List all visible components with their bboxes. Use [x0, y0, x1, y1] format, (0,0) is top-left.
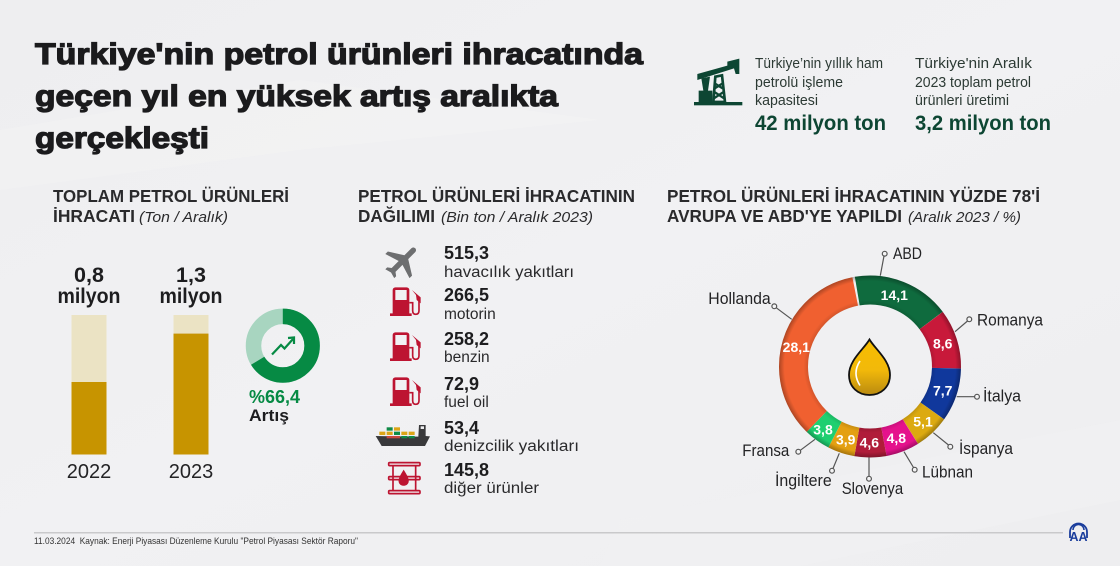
increase label: Artış — [249, 407, 289, 425]
text: December production: ürünleri üretimi — [915, 93, 1009, 109]
heading: (Bin ton / Aralık 2023) — [441, 210, 593, 226]
heading: TOPLAM PETROL ÜRÜNLERİ — [53, 186, 289, 206]
item: fuel oil: 72,9 — [444, 374, 479, 394]
donut chart: 14,1 — [881, 287, 908, 303]
title — [35, 38, 643, 155]
label: İtalya: İtalya — [983, 387, 1022, 406]
heading: İHRACATI — [53, 206, 135, 226]
source note: 11.03.2024 Kaynak: Enerji Piyasası Düzenleme Kurulu "Petrol Piyasası Sektör Raporu" — [34, 536, 358, 547]
donut chart — [762, 258, 978, 475]
heading — [53, 186, 289, 226]
item: aviation fuel: havacılık yakıtları — [444, 264, 574, 281]
text: refining capacity: 42 milyon ton — [755, 112, 886, 135]
bar: 2022: milyon — [58, 284, 120, 308]
panel: key figures — [694, 56, 1051, 135]
heading: (Ton / Aralık) — [139, 210, 228, 226]
label: Fransa: Fransa — [742, 442, 790, 460]
label: İtalya — [957, 387, 1022, 406]
label: Lübnan: Lübnan — [922, 463, 973, 481]
title: geçen yıl en yüksek artış aralıkta — [35, 80, 558, 113]
item: diesel: 266,5 — [444, 285, 489, 305]
bar: 2022 — [58, 263, 120, 483]
icon: oil drop — [849, 340, 890, 395]
label: Lübnan — [904, 452, 973, 481]
increase label: %66,4 — [249, 386, 301, 407]
icon: rising arrow — [272, 338, 294, 354]
item: petrol: 258,2 — [444, 329, 489, 349]
label: Romanya — [955, 312, 1044, 332]
bar: 2023 — [160, 263, 222, 483]
text: refining capacity: petrolü işleme — [755, 75, 843, 91]
donut chart: 3,9 — [836, 431, 856, 447]
title: Türkiye'nin petrol ürünleri ihracatında — [35, 38, 643, 71]
item: other products: 145,8 — [444, 460, 489, 480]
icon: barrel — [389, 463, 420, 494]
donut chart: 28,1 — [783, 339, 810, 355]
donut chart: 8,6 — [933, 335, 953, 351]
item: fuel oil: fuel oil — [444, 394, 489, 411]
icon: fuel pump — [390, 377, 421, 406]
bar: 2023: milyon — [160, 284, 222, 308]
icon: oil pump jack — [694, 59, 742, 105]
donut chart: 4,8 — [887, 430, 906, 446]
label: Romanya: Romanya — [977, 312, 1044, 330]
label: İngiltere: İngiltere — [775, 471, 832, 490]
text: refining capacity: kapasitesi — [755, 93, 818, 109]
donut chart: 3,8 — [813, 421, 833, 437]
panel: product breakdown — [358, 186, 635, 497]
heading — [667, 186, 1040, 226]
logo: AA: AA — [1070, 529, 1088, 544]
panel: export destinations — [667, 186, 1044, 498]
label: ABD — [880, 245, 922, 276]
item: fuel oil — [444, 374, 489, 411]
item: petrol — [444, 329, 490, 366]
item: marine fuel: denizcilik yakıtları — [444, 438, 579, 455]
donut chart: 7,7 — [933, 383, 953, 399]
label: Hollanda: Hollanda — [708, 290, 771, 308]
icon: airplane — [378, 236, 427, 286]
label: Fransa — [742, 439, 815, 460]
bar: 2023: 2023 — [169, 461, 213, 483]
item: aviation fuel: 515,3 — [444, 243, 489, 263]
label: İngiltere — [775, 453, 839, 490]
label: ABD: ABD — [893, 245, 922, 263]
icon: fuel pump — [390, 332, 421, 361]
item: diesel — [444, 285, 496, 323]
item: aviation fuel — [444, 243, 574, 281]
label: Hollanda — [708, 290, 792, 319]
icon: fuel pump — [390, 287, 421, 316]
item: marine fuel: 53,4 — [444, 418, 479, 438]
text: refining capacity — [755, 56, 886, 135]
item: other products — [444, 460, 539, 497]
text: December production: 2023 toplam petrol — [915, 75, 1031, 91]
increase label — [249, 386, 301, 425]
label: İspanya: İspanya — [959, 439, 1014, 458]
text: December production: 3,2 milyon ton — [915, 112, 1051, 135]
heading — [358, 186, 635, 226]
bar: 2023: 1,3 — [176, 263, 206, 287]
heading: (Aralık 2023 / %) — [908, 210, 1021, 226]
text: refining capacity: Türkiye’nin yıllık ham — [755, 56, 883, 72]
heading: PETROL ÜRÜNLERİ İHRACATININ YÜZDE 78'İ — [667, 186, 1040, 206]
increase donut — [253, 316, 312, 375]
label: Slovenya: Slovenya — [842, 480, 904, 498]
item: other products: diğer ürünler — [444, 480, 539, 497]
icon: container ship — [376, 425, 430, 446]
label: İspanya — [933, 433, 1014, 458]
text: December production — [915, 56, 1051, 135]
heading: DAĞILIMI — [358, 205, 435, 226]
item: petrol: benzin — [444, 349, 490, 366]
item: marine fuel — [444, 418, 579, 455]
panel: total exports — [53, 186, 312, 483]
text: December production: Türkiye'nin Aralık — [915, 56, 1033, 72]
bar: 2022: 2022 — [67, 461, 111, 483]
donut chart: 5,1 — [913, 414, 933, 430]
label: Slovenya — [842, 457, 904, 498]
heading: PETROL ÜRÜNLERİ İHRACATININ — [358, 186, 635, 206]
title: gerçekleşti — [35, 122, 209, 155]
donut chart: 4,6 — [860, 435, 879, 451]
heading: AVRUPA VE ABD'YE YAPILDI — [667, 206, 902, 226]
item: diesel: motorin — [444, 306, 496, 323]
bar: 2022: 0,8 — [74, 263, 104, 287]
